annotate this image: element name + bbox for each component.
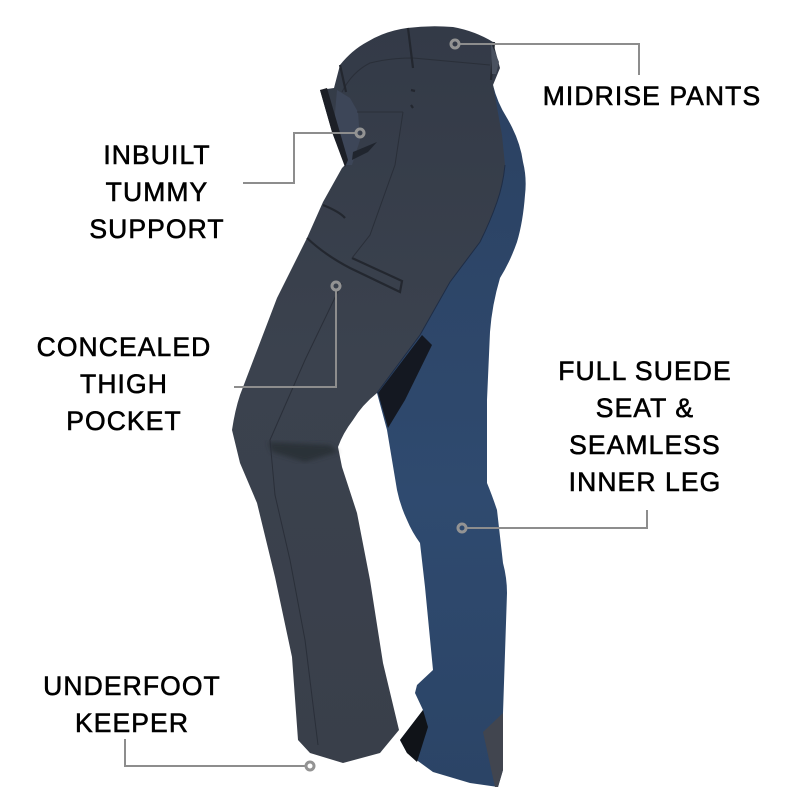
back belt loop: [491, 43, 499, 74]
callout: full suede seat and seamless inner leg: [458, 356, 732, 532]
side seam: [270, 283, 342, 745]
callout: full suede seat and seamless inner leg: INNER LEG: [569, 467, 721, 497]
callout: full suede seat and seamless inner leg: FULL SUEDE: [558, 356, 732, 386]
fly edge: [320, 88, 348, 167]
suede back and far leg: [377, 60, 526, 787]
pocket flap: [307, 205, 402, 292]
callout: underfoot keeper: UNDERFOOT: [43, 671, 221, 701]
callout: midrise pants: MIDRISE PANTS: [543, 81, 761, 111]
pocket shadow: [352, 142, 377, 160]
callout: inbuilt tummy support: INBUILT: [103, 140, 211, 170]
callout: inbuilt tummy support: TUMMY: [106, 177, 208, 207]
callout: midrise pants: [451, 40, 761, 111]
callout: concealed thigh pocket: CONCEALED: [37, 332, 211, 362]
hem grey patch: [483, 713, 503, 787]
callout: underfoot keeper: KEEPER: [75, 708, 189, 738]
pants photo illustration: [232, 26, 526, 787]
callout: concealed thigh pocket: THIGH: [80, 369, 168, 399]
callout: inbuilt tummy support: SUPPORT: [89, 214, 225, 244]
waistband and belt loops: [342, 58, 490, 92]
dark outer panel: [232, 26, 505, 763]
hip seam: [352, 112, 403, 258]
callout: full suede seat and seamless inner leg: SEAT &: [596, 393, 694, 423]
callout: concealed thigh pocket: [37, 282, 340, 436]
callout: inbuilt tummy support: [89, 129, 364, 244]
knee creases: [268, 442, 338, 462]
callout: underfoot keeper: [43, 671, 314, 770]
crotch shadow: [378, 335, 432, 428]
callout: full suede seat and seamless inner leg: SEAMLESS: [569, 430, 721, 460]
fly panel: [334, 90, 360, 165]
callout: concealed thigh pocket: POCKET: [66, 406, 182, 436]
inner hem panel: [400, 710, 428, 762]
suede seam: [377, 165, 505, 393]
